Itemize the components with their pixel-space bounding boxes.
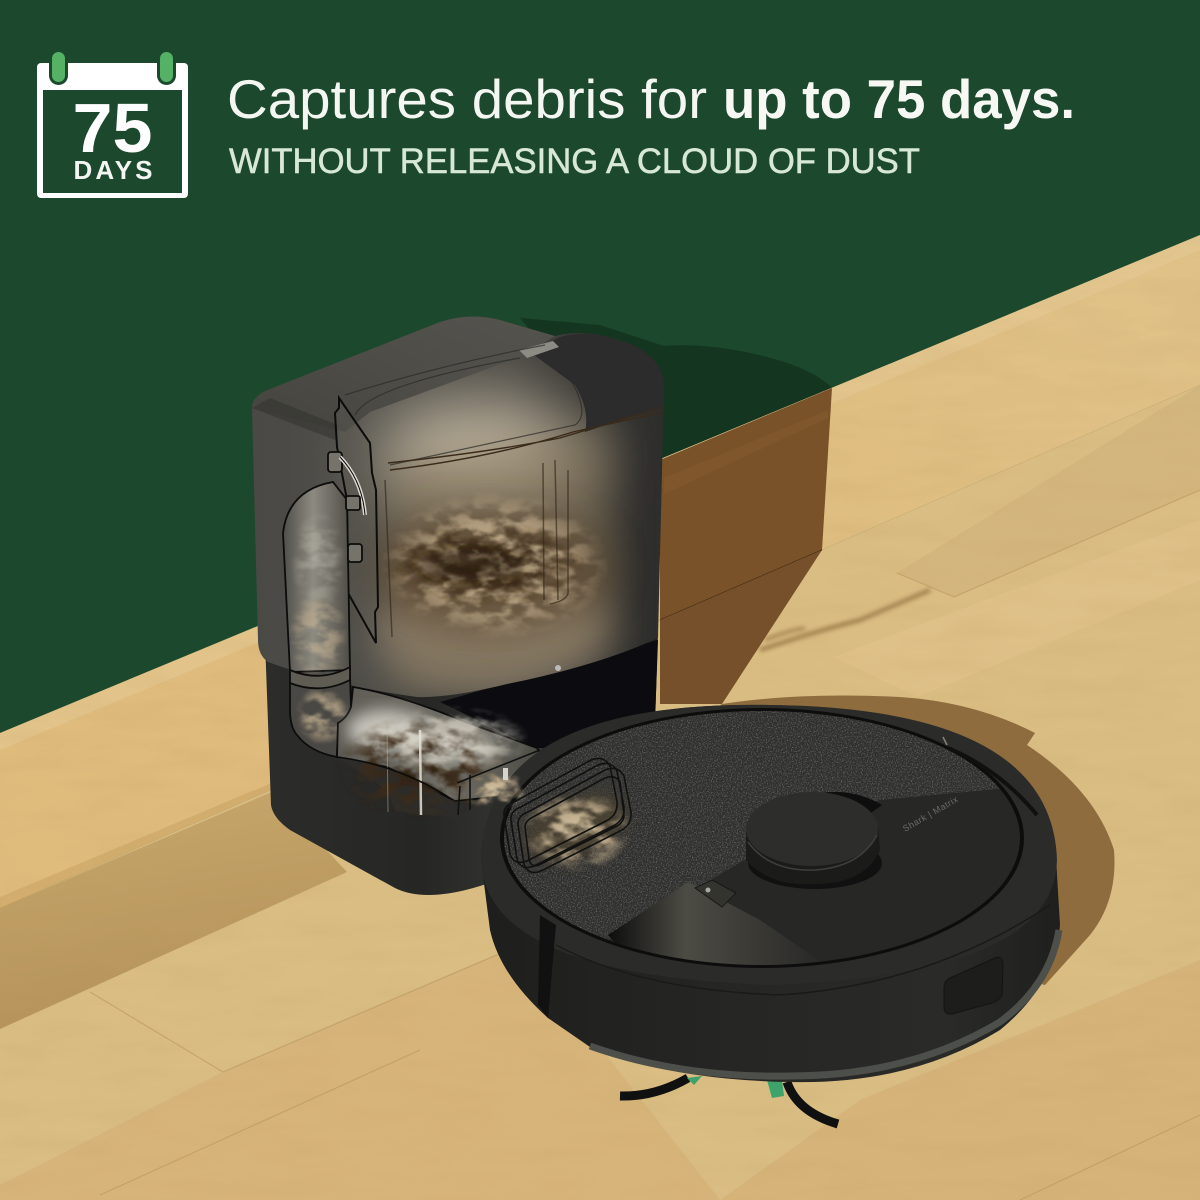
bumper seam <box>538 915 556 1018</box>
side brushes <box>620 1078 838 1124</box>
glossy panel <box>608 882 815 965</box>
headline: Captures debris for <box>227 68 707 130</box>
calendar icon <box>37 48 188 198</box>
floor knot grain mark <box>760 590 930 650</box>
top plate <box>500 708 1024 968</box>
docking station <box>252 316 664 895</box>
side vent <box>944 957 1003 1014</box>
headline <box>227 68 1075 130</box>
filter door <box>335 398 378 643</box>
station shadow on floor <box>660 550 822 704</box>
wall shadow behind station <box>520 318 832 460</box>
lettering on plate: Shark | Matrix <box>901 794 960 834</box>
duct lower lobe <box>337 757 458 818</box>
lidar turret <box>800 792 882 815</box>
vertical pipe <box>283 482 350 672</box>
station base <box>265 630 658 895</box>
dot on station <box>555 665 561 671</box>
shadow of station on baseboard <box>660 388 832 620</box>
control buttons <box>695 880 736 907</box>
top notches <box>948 748 1037 815</box>
station upper body <box>252 316 664 697</box>
calendar number: 75 <box>72 89 152 167</box>
station lid <box>328 316 554 432</box>
robot vacuum <box>457 700 1060 1124</box>
lower pipe elbow and duct <box>290 676 351 757</box>
interior glow and dust <box>252 316 664 690</box>
dust-bin nozzle <box>457 750 634 874</box>
bumper strip <box>590 930 1059 1076</box>
wooden floor <box>0 385 1200 1200</box>
collar <box>290 667 350 688</box>
robot shadow on floor <box>640 696 1114 985</box>
headline: up to 75 days. <box>723 68 1075 130</box>
baseboard <box>0 235 1200 908</box>
calendar frame <box>37 63 188 198</box>
calendar unit: DAYS <box>74 155 152 185</box>
station lid outlines <box>345 345 582 465</box>
brush hubs <box>767 1080 784 1098</box>
calendar rings <box>49 48 68 85</box>
hinge details <box>328 452 365 562</box>
subheading: WITHOUT RELEASING A CLOUD OF DUST <box>229 142 920 181</box>
robot body <box>481 705 1060 1082</box>
